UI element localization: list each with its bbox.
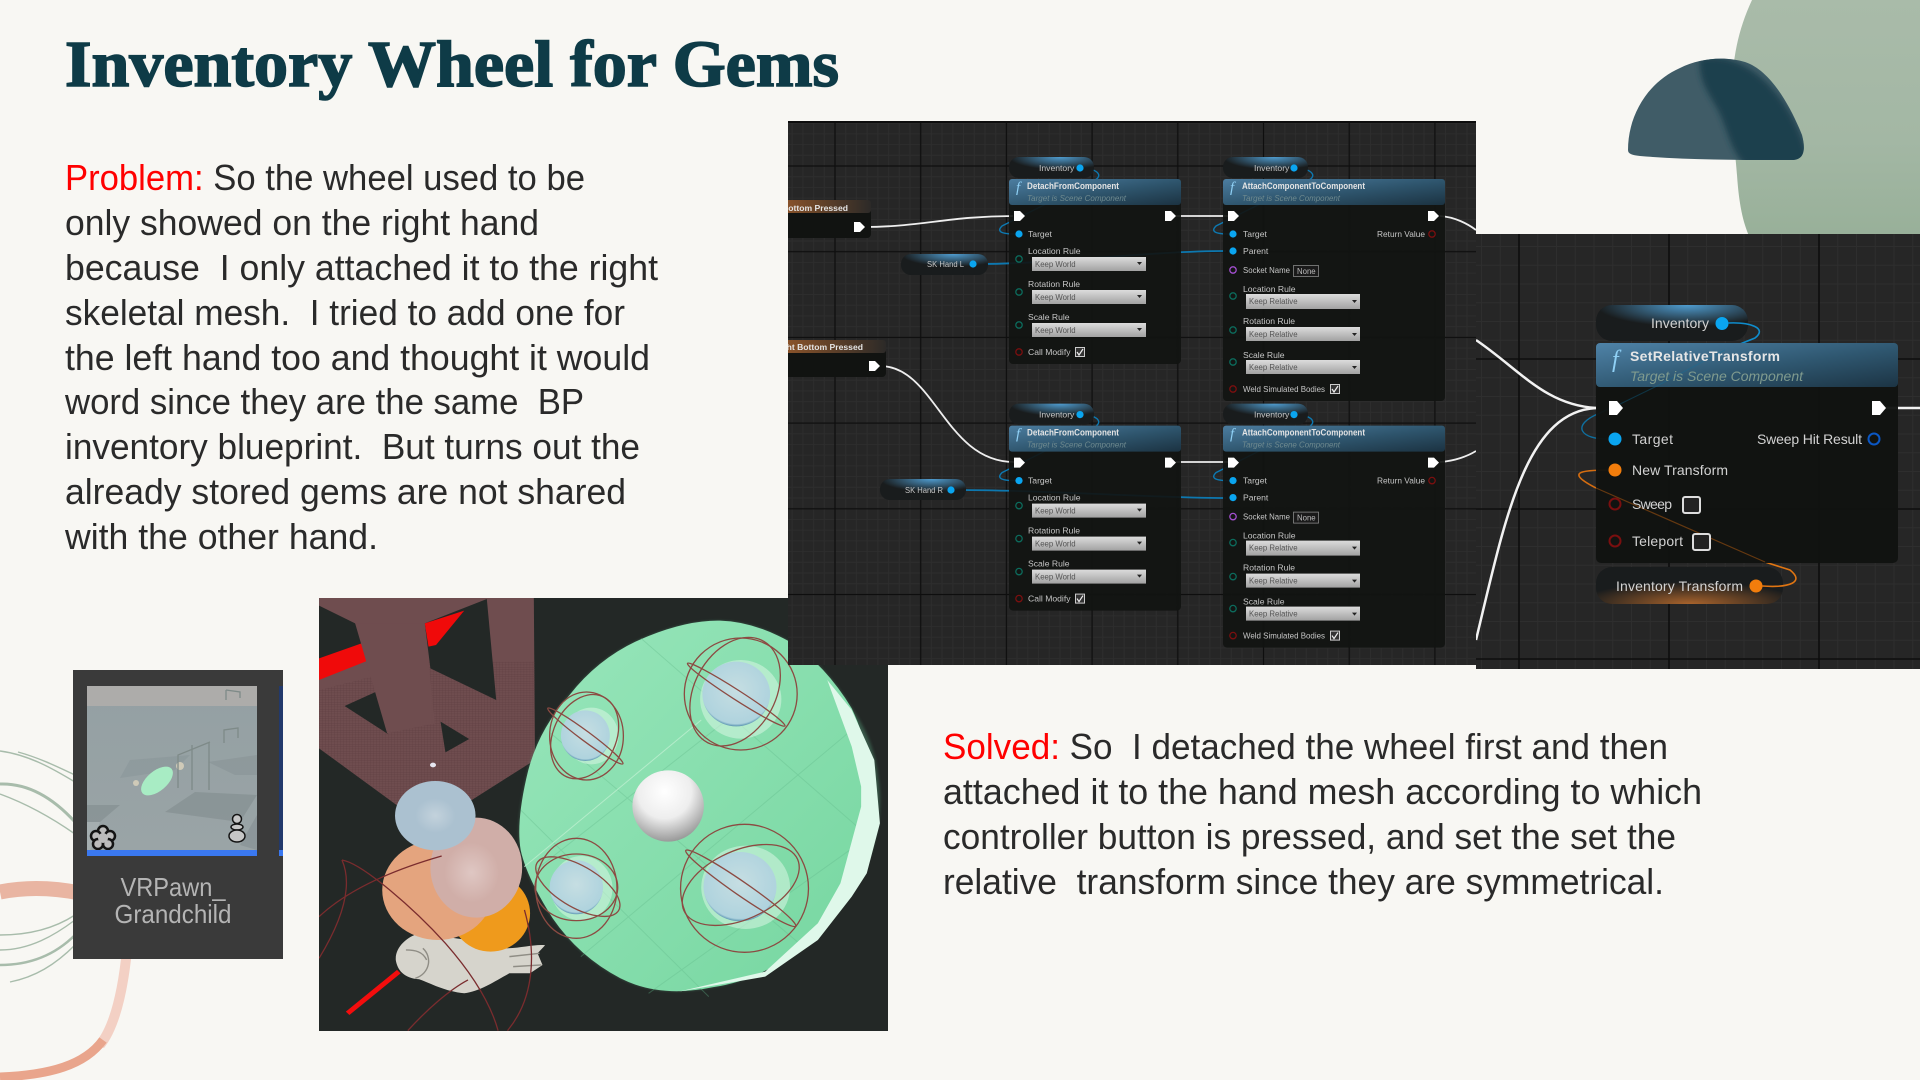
node: DetachFromComponent lower: Call Modify (1028, 594, 1071, 604)
node: AttachComponentToComponent lower: Socket Name (1243, 512, 1290, 522)
text block: solved: relative transform since they are symmetrical. (943, 861, 1664, 902)
card label (114, 872, 232, 929)
variable: SK Hand L (901, 254, 988, 275)
next thumbnail sliver (279, 686, 283, 856)
node: AttachComponentToComponent upper: Target (1243, 229, 1267, 239)
node: DetachFromComponent lower: Rotation Rule (1028, 526, 1080, 536)
wires (1476, 340, 1920, 640)
node: AttachComponentToComponent lower: Parent (1243, 493, 1269, 503)
node: DetachFromComponent lower: Target (1028, 476, 1052, 486)
node: AttachComponentToComponent lower: AttachComponentToComponent (1242, 428, 1365, 438)
node: DetachFromComponent upper: Call Modify (1028, 347, 1071, 357)
small white dot (430, 763, 436, 767)
decoration: dark teal watercolor dome (1628, 58, 1804, 160)
node: DetachFromComponent lower: Scale Rule (1028, 559, 1070, 569)
node: DetachFromComponent lower: Keep World (1035, 540, 1076, 549)
function node body: Target is Scene Component (1630, 368, 1804, 384)
node: DetachFromComponent lower: Target is Scene Component (1027, 440, 1127, 450)
variable: Inventory: Inventory (1651, 315, 1709, 331)
node: DetachFromComponent lower: Location Rule (1028, 493, 1081, 503)
event node: bottom pressed: Bottom Pressed (782, 203, 848, 213)
node: AttachComponentToComponent upper (1223, 157, 1445, 401)
function node body: f (1612, 347, 1622, 373)
node: DetachFromComponent upper: Inventory (1039, 163, 1075, 173)
node: DetachFromComponent upper: f (1016, 180, 1022, 196)
variable: Inventory Transform (1596, 567, 1783, 604)
node: DetachFromComponent upper: Rotation Rule (1028, 279, 1080, 289)
card label: Grandchild (114, 899, 232, 929)
variable: SK Hand L: SK Hand L (927, 259, 964, 269)
text block: problem: the left hand too and thought it would (65, 337, 650, 378)
node: AttachComponentToComponent upper: Weld Simulated Bodies (1243, 384, 1325, 394)
center pearl (632, 770, 704, 842)
function node body: Sweep Hit Result (1757, 431, 1862, 447)
text block: solved: controller button is pressed, and set the set the (943, 816, 1676, 857)
text block: problem: skeletal mesh. I tried to add one for (65, 292, 625, 333)
function node body: New Transform (1632, 462, 1728, 478)
data wires behind node (1579, 323, 1796, 586)
node: AttachComponentToComponent lower: Keep Relative (1249, 577, 1298, 586)
gem wire rings (525, 625, 815, 952)
node: DetachFromComponent upper: DetachFromComponent (1027, 181, 1119, 191)
node: AttachComponentToComponent upper: None (1297, 267, 1316, 276)
node: AttachComponentToComponent upper: Parent (1243, 246, 1269, 256)
wooden frame (319, 598, 535, 805)
node: AttachComponentToComponent upper: Keep Relative (1249, 297, 1298, 306)
variable: Inventory Transform: Inventory Transform (1616, 578, 1743, 594)
node: DetachFromComponent upper: Keep World (1035, 260, 1076, 269)
node: DetachFromComponent lower: f (1016, 427, 1022, 443)
node: AttachComponentToComponent lower: Keep Relative (1249, 610, 1298, 619)
function node body: SetRelativeTransform (1630, 348, 1780, 364)
function node body: Target (1632, 431, 1673, 447)
node: DetachFromComponent upper: Keep World (1035, 326, 1076, 335)
node: AttachComponentToComponent lower: Weld Simulated Bodies (1243, 631, 1325, 641)
node: DetachFromComponent upper (1009, 157, 1181, 364)
text block: problem: inventory blueprint. But turns out the (65, 426, 640, 467)
wires (864, 168, 1476, 498)
node: AttachComponentToComponent lower: Target is Scene Component (1242, 440, 1341, 450)
node: AttachComponentToComponent lower: Rotation Rule (1243, 563, 1295, 573)
node: AttachComponentToComponent upper: Rotation Rule (1243, 316, 1295, 326)
node: DetachFromComponent lower: Keep World (1035, 507, 1076, 516)
thumbnail image (87, 686, 257, 856)
event node: right bottom pressed (788, 340, 886, 377)
controller spheres (382, 781, 530, 952)
node: AttachComponentToComponent upper: Return Value (1377, 229, 1425, 239)
gems (550, 660, 790, 929)
text block: problem: word since they are the same BP (64, 381, 584, 422)
text block: solved (943, 726, 1702, 902)
node: AttachComponentToComponent lower: Return Value (1377, 476, 1425, 486)
text block: problem: because I only attached it to the right (65, 247, 658, 288)
hand mesh (396, 933, 545, 993)
node: DetachFromComponent lower: Inventory (1039, 410, 1075, 420)
function node body: Sweep (1632, 496, 1672, 512)
node: AttachComponentToComponent upper: Scale Rule (1243, 350, 1285, 360)
node: DetachFromComponent upper: Target (1028, 229, 1052, 239)
variable: SK Hand R: SK Hand R (905, 485, 943, 495)
text block: solved: attached it to the hand mesh according to which (943, 771, 1702, 812)
function node body: Teleport (1632, 533, 1683, 549)
title: Inventory Wheel for Gems (65, 28, 839, 101)
node: AttachComponentToComponent upper: Inventory (1254, 163, 1290, 173)
node: AttachComponentToComponent upper: f (1230, 180, 1236, 196)
node: AttachComponentToComponent upper: Target is Scene Component (1242, 193, 1341, 203)
node: AttachComponentToComponent upper: Keep Relative (1249, 363, 1298, 372)
node: DetachFromComponent lower (1009, 404, 1181, 611)
node: AttachComponentToComponent lower: Keep Relative (1249, 544, 1298, 553)
node: AttachComponentToComponent lower: None (1297, 514, 1316, 523)
text block: problem: with the other hand. (64, 516, 378, 557)
icon: pawn badge (229, 814, 245, 842)
panel: 3D viewport of the gem wheel (319, 598, 888, 1031)
node: AttachComponentToComponent lower: Scale Rule (1243, 597, 1285, 607)
red pointer stick (348, 972, 399, 1013)
text block: problem: Problem: So the wheel used to be (65, 157, 585, 198)
node: AttachComponentToComponent upper: Location Rule (1243, 284, 1296, 294)
node: AttachComponentToComponent lower: Inventory (1254, 410, 1290, 420)
node: DetachFromComponent upper: Scale Rule (1028, 312, 1070, 322)
node: DetachFromComponent lower: DetachFromComponent (1027, 428, 1119, 438)
variable: Inventory (1596, 305, 1748, 341)
node: AttachComponentToComponent lower: f (1230, 427, 1236, 443)
function node body (1596, 343, 1898, 563)
text block: problem: already stored gems are not shared (65, 471, 626, 512)
node: DetachFromComponent upper: Location Rule (1028, 246, 1081, 256)
icon: actor badge (91, 826, 115, 849)
event node: right bottom pressed: Right Bottom Pressed (773, 342, 863, 352)
text block: solved: Solved: So I detached the wheel first and then (943, 726, 1668, 767)
node: AttachComponentToComponent upper: Socket Name (1243, 265, 1290, 275)
decoration: sage watercolor blob (1732, 0, 1920, 236)
text block: problem: only showed on the right hand (65, 202, 539, 243)
panel: SetRelativeTransform blueprint node (1476, 234, 1920, 669)
panel: blueprint asset thumbnail card (73, 670, 283, 959)
node: AttachComponentToComponent upper: Keep Relative (1249, 330, 1298, 339)
card label: VRPawn_ (120, 872, 226, 902)
node: AttachComponentToComponent lower (1223, 404, 1445, 648)
node: AttachComponentToComponent upper: AttachComponentToComponent (1242, 181, 1365, 191)
node: DetachFromComponent upper: Keep World (1035, 293, 1076, 302)
red wire arcs (319, 856, 531, 1031)
decoration: left brush strokes (0, 751, 127, 1077)
node: DetachFromComponent upper: Target is Scene Component (1027, 193, 1127, 203)
node: AttachComponentToComponent lower: Target (1243, 476, 1267, 486)
text block: problem (64, 157, 658, 557)
node: AttachComponentToComponent lower: Location Rule (1243, 531, 1296, 541)
panel: blueprint detach and attach nodes (770, 120, 1476, 665)
variable: SK Hand R (880, 479, 966, 500)
node: DetachFromComponent lower: Keep World (1035, 573, 1076, 582)
event node: bottom pressed (788, 200, 871, 238)
wheel disc (519, 621, 880, 997)
